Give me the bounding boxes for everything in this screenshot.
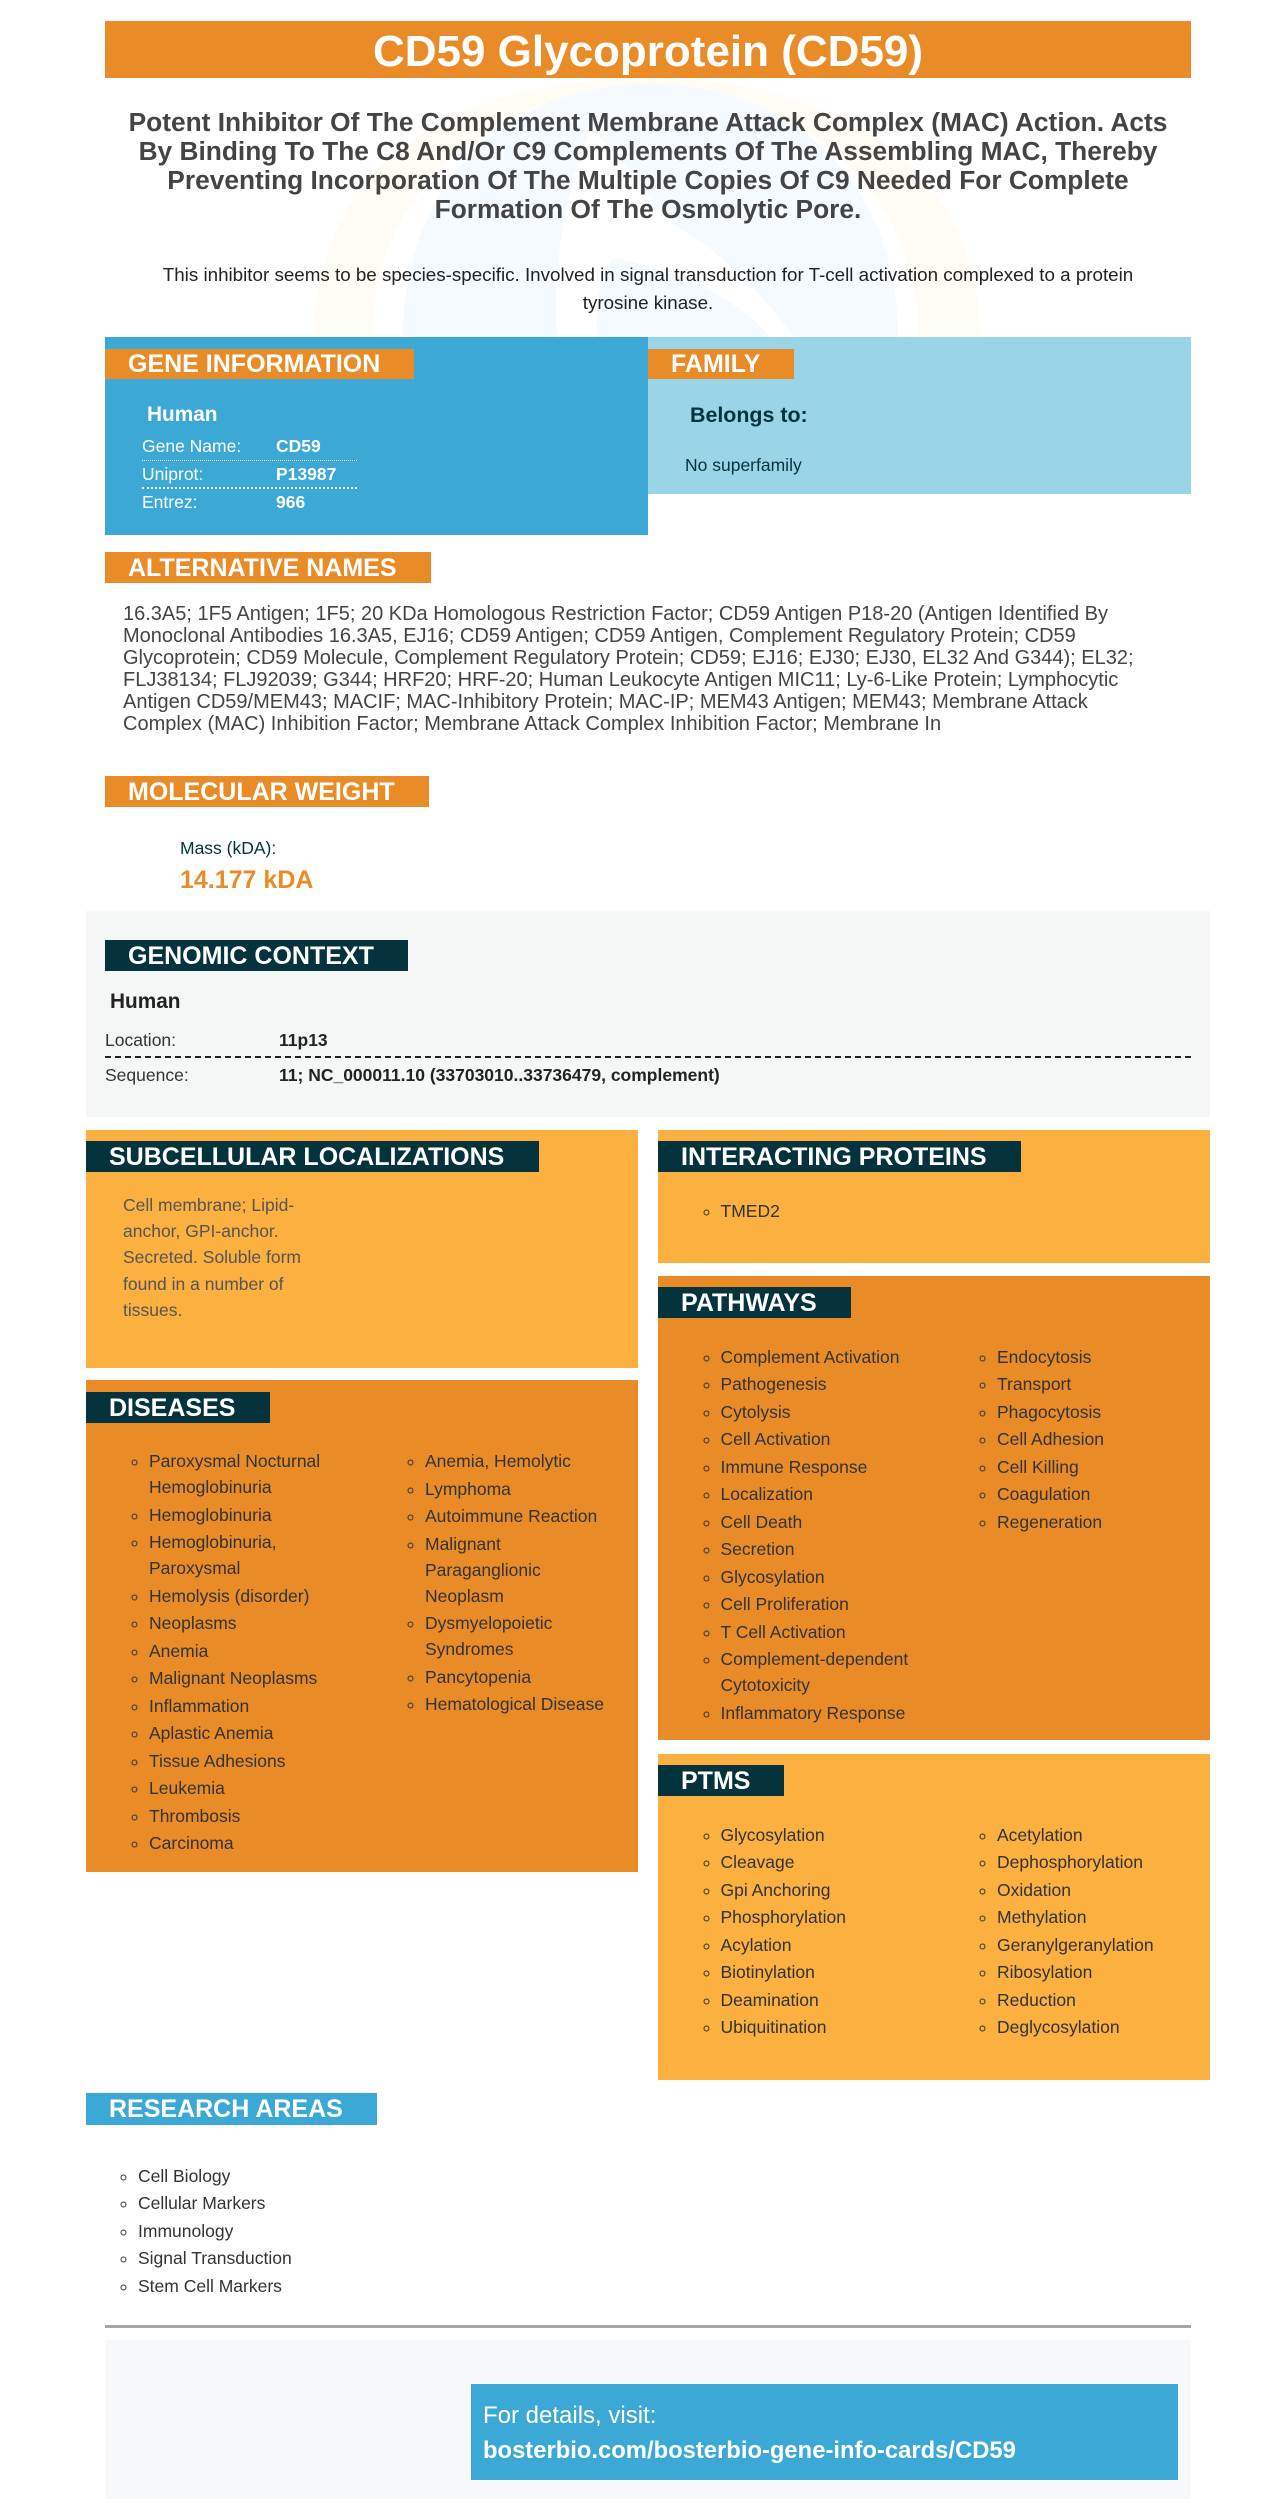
uniprot row: Uniprot: <box>142 464 203 484</box>
diseases list column 2: Anemia, Hemolytic <box>425 1451 571 1471</box>
heading: gene information: GENE INFORMATION <box>128 350 380 378</box>
description <box>163 264 1133 313</box>
diseases list column 2: Dysmyelopoietic <box>425 1613 552 1633</box>
heading: ptms <box>658 1765 784 1796</box>
diseases list column 1: Malignant Neoplasms <box>149 1668 317 1688</box>
heading: ptms: PTMS <box>681 1767 750 1795</box>
pathways list column 1: Secretion <box>720 1539 794 1559</box>
alternative names text: Antigen CD59/MEM43; MACIF; MAC-Inhibitory Protein; MAC-IP; MEM43 Antigen; MEM43; Membrane Attack <box>123 691 1088 713</box>
diseases list column 1: Neoplasms <box>149 1613 237 1633</box>
pathways list column 2: Coagulation <box>997 1484 1090 1504</box>
callout: details link <box>471 2384 1178 2480</box>
ptms list column 2: Reduction <box>997 1990 1076 2010</box>
diseases list column 1: Aplastic Anemia <box>149 1723 274 1743</box>
pathways list column 1: Cytolysis <box>720 1402 791 1422</box>
pathways list column 2 <box>980 1347 1104 1532</box>
diseases list column 2: Pancytopenia <box>425 1666 531 1686</box>
localization text: tissues. <box>123 1300 182 1320</box>
summary heading <box>129 107 1167 224</box>
diseases list column 2: Neoplasm <box>425 1586 504 1606</box>
title <box>105 21 1191 78</box>
diseases list column 1: Anemia <box>149 1640 208 1660</box>
panel: pathways <box>658 1276 1210 1740</box>
panel: ptms <box>658 1754 1210 2080</box>
ptms list column 2: Methylation <box>997 1907 1086 1927</box>
research areas list <box>120 2166 292 2296</box>
divider <box>105 1056 1191 1058</box>
panel: genomic context <box>86 911 1210 1117</box>
diseases list column 2: Syndromes <box>425 1639 514 1659</box>
diseases list column 1: Hemoglobinuria <box>149 1504 272 1524</box>
panel: gene information <box>105 337 648 535</box>
pathways list column 1: Immune Response <box>720 1457 867 1477</box>
pathways list column 1: Cell Death <box>720 1512 802 1532</box>
summary heading: Potent Inhibitor Of The Complement Membrane Attack Complex (MAC) Action. Acts <box>129 107 1167 137</box>
pathways list column 2: Cell Killing <box>997 1457 1079 1477</box>
diseases list column 2: Autoimmune Reaction <box>425 1506 597 1526</box>
ptms list column 1 <box>704 1825 846 2037</box>
research areas list: Stem Cell Markers <box>138 2276 282 2296</box>
pathways list column 1: Complement-dependent <box>720 1649 908 1669</box>
mass value: 14.177 kDA <box>180 866 313 894</box>
panel: interacting proteins <box>658 1130 1210 1262</box>
heading: diseases <box>86 1392 270 1423</box>
ptms list column 2: Geranylgeranylation <box>997 1935 1154 1955</box>
ptms list column 1: Phosphorylation <box>720 1907 846 1927</box>
title: CD59 Glycoprotein (CD59) <box>373 27 923 76</box>
footer rule <box>105 2325 1191 2328</box>
diseases list column 2: Malignant <box>425 1534 501 1554</box>
diseases list column 1: Hemolysis (disorder) <box>149 1586 309 1606</box>
heading: genomic context: GENOMIC CONTEXT <box>128 942 374 970</box>
summary heading: Formation Of The Osmolytic Pore. <box>435 194 861 224</box>
heading: research areas: RESEARCH AREAS <box>109 2095 343 2123</box>
summary heading: Preventing Incorporation Of The Multiple Copies Of C9 Needed For Complete <box>167 165 1129 195</box>
pathways list column 1: Cytotoxicity <box>720 1675 810 1695</box>
alternative names text: FLJ38134; FLJ92039; G344; HRF20; HRF-20; Human Leukocyte Antigen MIC11; Ly-6-Like Protein; Lymphocytic <box>123 669 1118 691</box>
ptms list column 1: Cleavage <box>720 1852 794 1872</box>
diseases list column 2: Paraganglionic <box>425 1560 541 1580</box>
diseases list column 1: Tissue Adhesions <box>149 1750 286 1770</box>
callout url: bosterbio.com/bosterbio-gene-info-cards/CD59 <box>483 2437 1016 2464</box>
gene name row <box>142 434 357 461</box>
pathways list column 2: Transport <box>997 1374 1071 1394</box>
alternative names text: 16.3A5; 1F5 Antigen; 1F5; 20 KDa Homologous Restriction Factor; CD59 Antigen P18-20 (Antigen Identified By <box>123 603 1108 625</box>
family value: No superfamily <box>685 455 802 475</box>
watermark logo <box>314 78 980 337</box>
ptms list column 2: Acetylation <box>997 1825 1083 1845</box>
ptms list column 2: Ribosylation <box>997 1962 1092 1982</box>
heading: diseases: DISEASES <box>109 1394 235 1422</box>
panel: footer <box>105 2340 1191 2499</box>
pathways list column 1: Glycosylation <box>720 1567 825 1587</box>
location label: Location: <box>105 1030 176 1050</box>
pathways list column 1: Cell Proliferation <box>720 1594 849 1614</box>
alternative names text <box>123 603 1134 735</box>
research areas list: Cell Biology <box>138 2166 230 2186</box>
interacting proteins list: TMED2 <box>720 1201 780 1221</box>
uniprot row: P13987 <box>276 464 336 484</box>
callout label: For details, visit: <box>483 2402 656 2429</box>
ptms list column 2: Deglycosylation <box>997 2017 1120 2037</box>
panel: diseases <box>86 1380 638 1872</box>
heading: pathways <box>658 1287 851 1318</box>
diseases list column 2 <box>408 1451 604 1714</box>
heading: family <box>648 349 794 379</box>
ptms list column 2: Oxidation <box>997 1880 1071 1900</box>
description: tyrosine kinase. <box>583 292 713 313</box>
panel: family <box>648 337 1191 494</box>
uniprot row <box>142 462 357 489</box>
research areas list: Signal Transduction <box>138 2248 292 2268</box>
heading: alternative names: ALTERNATIVE NAMES <box>128 554 397 582</box>
summary heading: By Binding To The C8 And/Or C9 Complements Of The Assembling MAC, Thereby <box>139 136 1157 166</box>
diseases list column 1: Thrombosis <box>149 1806 240 1826</box>
pathways list column 1: Complement Activation <box>720 1347 899 1367</box>
sequence value: 11; NC_000011.10 (33703010..33736479, complement) <box>279 1065 720 1085</box>
diseases list column 2: Lymphoma <box>425 1478 511 1498</box>
ptms list column 1: Deamination <box>720 1990 819 2010</box>
ptms list column 1: Gpi Anchoring <box>720 1880 830 1900</box>
pathways list column 2: Phagocytosis <box>997 1402 1101 1422</box>
organism label: Human <box>147 403 217 426</box>
entrez row: 966 <box>276 492 305 512</box>
gene name row: Gene Name: <box>142 436 241 456</box>
diseases list column 1: Hemoglobinuria <box>149 1477 272 1497</box>
diseases list column 1: Paroxysmal Nocturnal <box>149 1451 320 1471</box>
pathways list column 2: Regeneration <box>997 1512 1102 1532</box>
pathways list column 1: Pathogenesis <box>720 1374 827 1394</box>
ptms list column 1: Acylation <box>720 1935 792 1955</box>
pathways list column 2: Cell Adhesion <box>997 1429 1104 1449</box>
ptms list column 1: Biotinylation <box>720 1962 815 1982</box>
pathways list column 1 <box>704 1347 908 1723</box>
heading: interacting proteins: INTERACTING PROTEINS <box>681 1143 987 1171</box>
belongs to label: Belongs to: <box>690 403 808 427</box>
localization text: found in a number of <box>123 1274 284 1294</box>
pathways list column 1: Localization <box>720 1484 813 1504</box>
sequence label: Sequence: <box>105 1065 189 1085</box>
organism label: Human <box>110 990 180 1013</box>
localization text: Cell membrane; Lipid- <box>123 1195 294 1215</box>
diseases list column 1: Hemoglobinuria, <box>149 1532 276 1552</box>
panel: subcellular localizations <box>86 1130 638 1368</box>
pathways list column 2: Endocytosis <box>997 1347 1091 1367</box>
research areas list: Immunology <box>138 2221 233 2241</box>
entrez row: Entrez: <box>142 492 197 512</box>
localization text: anchor, GPI-anchor. <box>123 1221 279 1241</box>
heading: family: FAMILY <box>671 350 760 378</box>
alternative names text: Complex (MAC) Inhibition Factor; Membrane Attack Complex Inhibition Factor; Membrane In <box>123 713 941 735</box>
alternative names text: Monoclonal Antibodies 16.3A5, EJ16; CD59 Antigen; CD59 Antigen, Complement Regulatory Protein; CD59 <box>123 625 1076 647</box>
description: This inhibitor seems to be species-specific. Involved in signal transduction for T-cell activation complexed to a protein <box>163 264 1133 285</box>
heading: molecular weight: MOLECULAR WEIGHT <box>128 778 395 806</box>
ptms list column 2 <box>980 1825 1154 2037</box>
diseases list column 1: Carcinoma <box>149 1833 234 1853</box>
pathways list column 1: Inflammatory Response <box>720 1703 905 1723</box>
pathways list column 1: T Cell Activation <box>720 1622 846 1642</box>
diseases list column 1 <box>132 1451 320 1853</box>
heading: pathways: PATHWAYS <box>681 1289 817 1317</box>
diseases list column 1: Paroxysmal <box>149 1558 240 1578</box>
localization text <box>123 1195 301 1320</box>
ptms list column 1: Glycosylation <box>720 1825 825 1845</box>
diseases list column 1: Inflammation <box>149 1696 249 1716</box>
diseases list column 1: Leukemia <box>149 1778 225 1798</box>
pathways list column 1: Cell Activation <box>720 1429 830 1449</box>
location value: 11p13 <box>279 1030 328 1050</box>
diseases list column 2: Hematological Disease <box>425 1694 604 1714</box>
localization text: Secreted. Soluble form <box>123 1247 301 1267</box>
gene name row: CD59 <box>276 436 321 456</box>
entrez row <box>142 492 305 512</box>
heading: subcellular localizations: SUBCELLULAR LOCALIZATIONS <box>109 1143 504 1171</box>
mass label: Mass (kDA): <box>180 838 276 858</box>
ptms list column 2: Dephosphorylation <box>997 1852 1143 1872</box>
ptms list column 1: Ubiquitination <box>720 2017 827 2037</box>
alternative names text: Glycoprotein; CD59 Molecule, Complement Regulatory Protein; CD59; EJ16; EJ30; EJ30, EL32 And G344); EL32; <box>123 647 1134 669</box>
research areas list: Cellular Markers <box>138 2193 265 2213</box>
